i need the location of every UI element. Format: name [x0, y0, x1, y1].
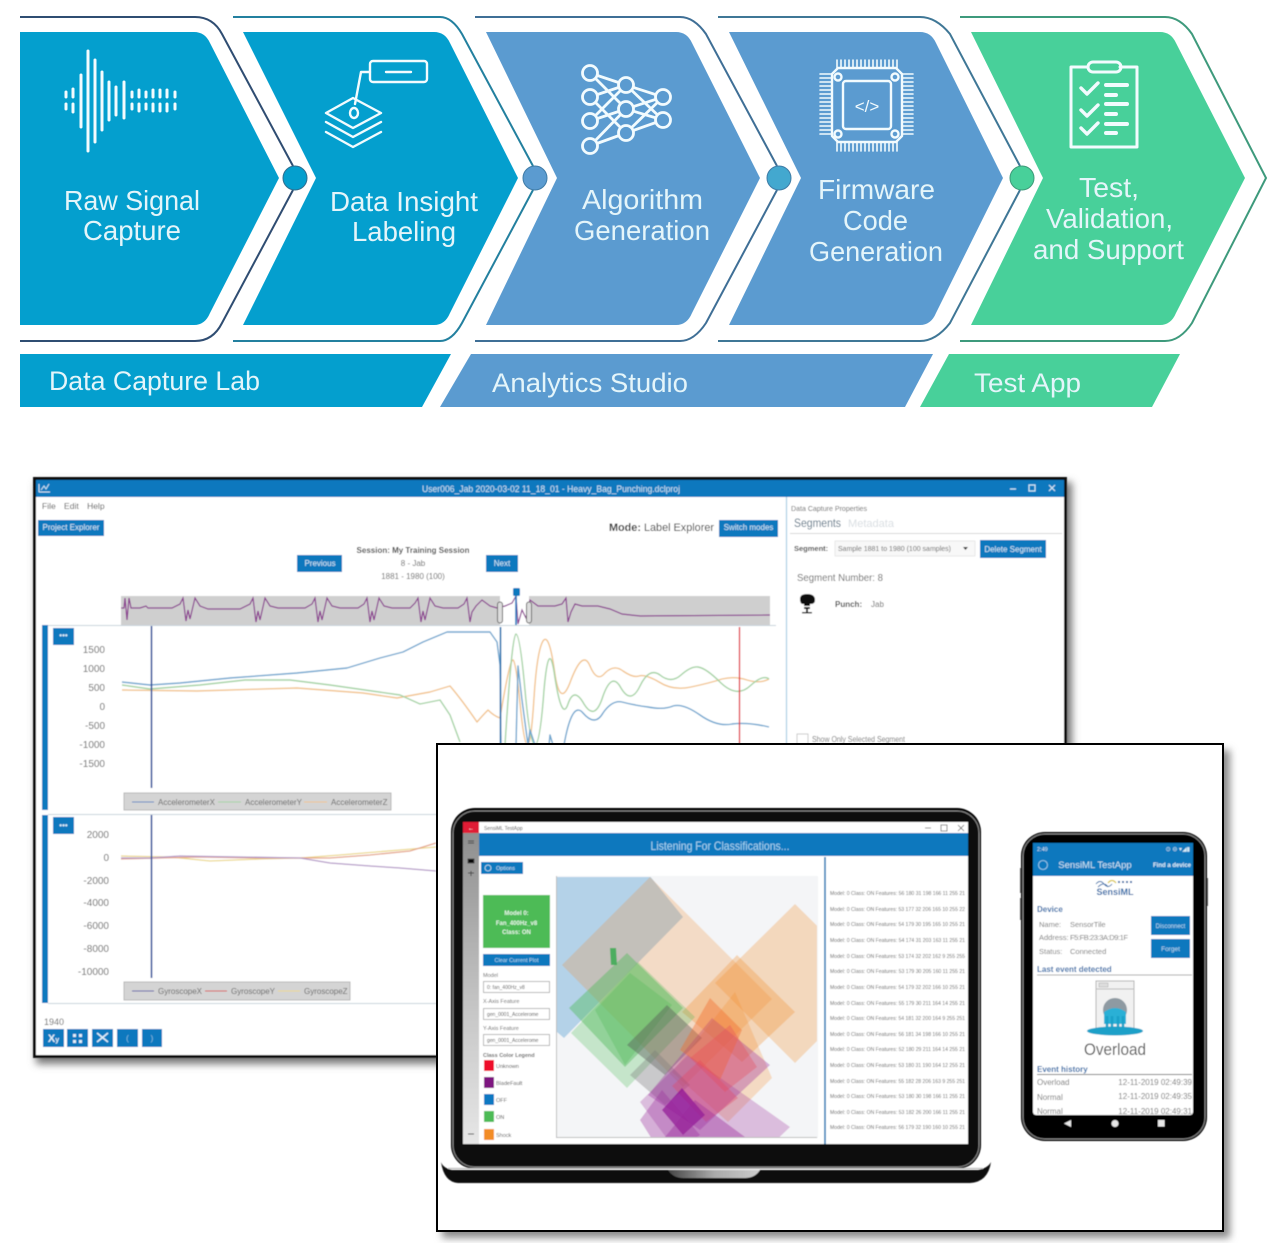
- device details: Name:: [1039, 920, 1061, 929]
- screenshot: data capture lab window: [34, 478, 1072, 1064]
- panel: gyroscope chart: •••: [59, 821, 68, 830]
- scatter plot of class regions: [556, 876, 818, 1138]
- label: [64, 185, 200, 246]
- event history: Event history: [1037, 1065, 1088, 1074]
- device details: SensorTile: [1070, 920, 1106, 929]
- panel: gyroscope chart: [42, 814, 440, 1004]
- label: [809, 174, 943, 267]
- menu: File Edit Help: [42, 501, 105, 511]
- laptop lid: [451, 808, 981, 1169]
- event history: 12-11-2019 02:49:39: [1118, 1078, 1193, 1087]
- device details: Forget: [1161, 946, 1180, 953]
- label: Raw Signal: [64, 185, 200, 216]
- classification log: Model: 0 Class: ON Features: 53 182 26 200 166 11 255 21: [830, 1110, 965, 1116]
- label: [1033, 172, 1184, 265]
- app chrome: [463, 822, 968, 1144]
- panel: accelerometer chart: [42, 625, 776, 810]
- session navigation: [297, 546, 518, 581]
- options column: Clear Current Plot: [494, 958, 539, 964]
- event history: Normal: [1037, 1107, 1063, 1116]
- band: test app: Test App: [974, 368, 1081, 398]
- legend: GyroscopeY: [231, 987, 276, 996]
- y axis: 2000: [87, 830, 109, 841]
- session navigation: Session: My Training Session: [357, 546, 470, 555]
- legend: [124, 793, 391, 810]
- mode selector: [609, 520, 778, 537]
- button: project explorer: [38, 520, 104, 536]
- y axis: 500: [88, 683, 105, 694]
- tool bands: [20, 354, 1180, 407]
- phone body: [1020, 832, 1208, 1141]
- label: Validation,: [1046, 203, 1173, 234]
- y axis: -6000: [83, 921, 109, 932]
- label: [330, 186, 478, 247]
- band: data capture lab: [20, 354, 451, 407]
- classification log: [825, 857, 965, 1144]
- classification log: Model: 0 Class: ON Features: 53 180 30 198 166 11 255 21: [830, 1094, 965, 1100]
- y axis: -1500: [79, 759, 105, 770]
- event history: Normal: [1037, 1093, 1063, 1102]
- SensiML logo: SensiML: [1096, 887, 1134, 897]
- legend: GyroscopeX: [158, 987, 203, 996]
- y axis: [79, 645, 105, 770]
- legend: AccelerometerY: [245, 798, 303, 807]
- app chrome: Listening For Classifications...: [650, 839, 790, 853]
- legend: AccelerometerZ: [331, 798, 388, 807]
- panel: data capture properties: Sample 1881 to 1980 (100 samples): [838, 544, 951, 553]
- android navigation bar: [1033, 1115, 1193, 1133]
- classification log: Model: 0 Class: ON Features: 55 182 28 206 163 9 255 251: [830, 1079, 965, 1085]
- panel: data capture properties: Punch:: [835, 600, 862, 609]
- workflow chevrons: [20, 17, 1266, 341]
- options column: 0: fan_400Hz_v8: [487, 985, 525, 991]
- y axis: 1000: [83, 664, 105, 675]
- session navigation: 1881 - 1980 (100): [381, 572, 445, 581]
- classification log: Model: 0 Class: ON Features: 56 181 34 198 166 10 255 21: [830, 1032, 965, 1038]
- options column: gen_0001_Accelerome: [487, 1038, 539, 1044]
- event history: 12-11-2019 02:49:31: [1118, 1107, 1193, 1116]
- icon: checklist clipboard: [1071, 62, 1137, 147]
- y axis: 0: [99, 702, 105, 713]
- icon: sound waveform: [66, 51, 175, 151]
- phone header: ⊙ ⊖ ▾◢▮: [1166, 847, 1190, 853]
- y axis: -4000: [83, 898, 109, 909]
- classification log: Model: 0 Class: ON Features: 54 179 30 195 165 10 255 21: [830, 922, 965, 928]
- SensiML logo: [1096, 880, 1134, 897]
- icon: neural network: [582, 66, 670, 154]
- device details: Connected: [1070, 947, 1106, 956]
- band: data capture lab: Data Capture Lab: [49, 366, 260, 396]
- classification badge: Model 0:: [504, 911, 529, 917]
- panel: data capture properties: Data Capture Properties: [791, 504, 867, 513]
- label: [574, 184, 710, 246]
- session navigation: 8 - Jab: [401, 559, 426, 568]
- legend: [124, 982, 350, 1000]
- toolbar buttons: (: [126, 1034, 129, 1043]
- label: Test,: [1079, 172, 1139, 203]
- classification log: Model: 0 Class: ON Features: 52 180 29 211 164 14 255 21: [830, 1047, 965, 1053]
- phone header: 2:49: [1037, 847, 1048, 853]
- y axis: -8000: [83, 944, 109, 955]
- button: project explorer: Project Explorer: [43, 523, 100, 532]
- icon: microchip with code: [820, 60, 913, 151]
- toolbar buttons: Xy: [48, 1033, 59, 1045]
- sample counter: 1940: [44, 1017, 64, 1027]
- class colour legend: Unknown: [496, 1064, 519, 1070]
- label: and Support: [1033, 234, 1184, 265]
- classification log: Model: 0 Class: ON Features: 53 180 31 190 164 12 255 21: [830, 1063, 965, 1069]
- y axis: -500: [85, 721, 105, 732]
- signal lines: [121, 843, 436, 871]
- phone header: [1033, 843, 1193, 876]
- class colour legend: OFF: [496, 1098, 508, 1104]
- device details: Device: [1037, 905, 1063, 914]
- mode selector: Switch modes: [724, 523, 773, 532]
- legend: GyroscopeZ: [304, 987, 348, 996]
- panel: data capture properties: Segment:: [794, 544, 828, 553]
- session navigation: Next: [494, 559, 511, 568]
- last event: [1037, 965, 1192, 1059]
- toolbar buttons: ): [151, 1034, 154, 1043]
- last event: Last event detected: [1037, 965, 1112, 974]
- panel: data capture properties: [786, 497, 1062, 745]
- mode selector: Mode: Label Explorer: [609, 522, 714, 534]
- icon: overflowing washing machine: [1087, 981, 1143, 1036]
- label: Algorithm: [582, 184, 703, 215]
- classification log: Model: 0 Class: ON Features: 54 179 32 202 166 10 255 21: [830, 985, 965, 991]
- event history: Overload: [1037, 1078, 1069, 1087]
- panel: data capture properties: Show Only Selected Segment: [812, 735, 906, 744]
- device: laptop: [441, 808, 991, 1183]
- icon: labelled data layers: [326, 61, 427, 147]
- classification log: Model: 0 Class: ON Features: 54 174 31 203 163 11 255 21: [830, 938, 965, 944]
- panel: data capture properties: Jab: [871, 600, 884, 609]
- label: Capture: [83, 215, 181, 246]
- icon: label cloud: [800, 594, 815, 614]
- class colour legend: Shock: [496, 1133, 512, 1139]
- classification badge: Fan_400Hz_v8: [496, 921, 538, 927]
- classification log: Model: 0 Class: ON Features: 56 180 31 198 166 11 255 21: [830, 891, 965, 897]
- panel: data capture properties: Segment Number: 8: [797, 573, 883, 584]
- band: analytics studio: Analytics Studio: [492, 368, 688, 398]
- panel: data capture properties: Delete Segment: [984, 545, 1042, 554]
- step: test, validation and support: [960, 17, 1266, 341]
- label: Data Insight: [330, 186, 478, 217]
- event history: 12-11-2019 02:49:35: [1118, 1092, 1193, 1101]
- label: Generation: [809, 236, 943, 267]
- label: Code: [843, 205, 908, 236]
- last event: Overload: [1084, 1040, 1146, 1059]
- options column: Y-Axis Feature: [483, 1026, 519, 1032]
- classification log: Model: 0 Class: ON Features: 56 179 32 190 160 10 255 21: [830, 1125, 965, 1131]
- y axis: [78, 830, 109, 978]
- classification log: Model: 0 Class: ON Features: 55 179 30 211 164 14 255 21: [830, 1001, 965, 1007]
- step: algorithm generation: [475, 17, 791, 341]
- classification log: Model: 0 Class: ON Features: 53 177 32 206 165 10 255 22: [830, 907, 965, 913]
- toolbar buttons: [43, 1029, 162, 1047]
- class colour legend: ON: [496, 1115, 504, 1121]
- icon: microchip with code: </>: [855, 97, 879, 116]
- laptop base: [441, 1162, 991, 1183]
- panel: data capture properties: Segments: [794, 516, 841, 530]
- band: analytics studio: [440, 354, 933, 407]
- band: test app: [920, 354, 1180, 407]
- device: phone: [1020, 832, 1208, 1141]
- y axis: -10000: [78, 967, 109, 978]
- app chrome: SensiML TestApp: [484, 826, 523, 832]
- y axis: 1500: [83, 645, 105, 656]
- step: firmware code generation: [718, 17, 1034, 341]
- step: data insight labeling: [233, 17, 547, 341]
- overlay: test app devices panel: [437, 744, 1230, 1238]
- options column: X-Axis Feature: [483, 999, 519, 1005]
- title bar: User006_Jab 2020-03-02 11_18_01 - Heavy_Bag_Punching.dclproj: [422, 484, 680, 495]
- label: Firmware: [818, 174, 935, 205]
- options column: gen_0001_Accelerome: [487, 1012, 539, 1018]
- y axis: -1000: [79, 740, 105, 751]
- label: Generation: [574, 215, 710, 246]
- y axis: 0: [103, 853, 109, 864]
- overview signal strip: [121, 588, 770, 625]
- classification badge: Class: ON: [502, 930, 531, 936]
- classification log: Model: 0 Class: ON Features: 53 174 32 202 162 9 255 255: [830, 954, 965, 960]
- classification log: Model: 0 Class: ON Features: 53 179 30 205 160 11 255 21: [830, 969, 965, 975]
- event history: [1037, 1065, 1193, 1116]
- panel: accelerometer chart: •••: [59, 631, 68, 640]
- options column: Class Color Legend: [483, 1053, 535, 1059]
- classification badge: [483, 895, 550, 948]
- phone header: SensiML TestApp: [1058, 860, 1132, 871]
- class colour legend: BladeFault: [496, 1081, 523, 1087]
- panel: data capture properties: Metadata: [848, 518, 895, 530]
- classification log: Model: 0 Class: ON Features: 54 181 32 200 164 9 255 251: [830, 1016, 965, 1022]
- title bar: [36, 480, 1064, 497]
- device details: Address:: [1039, 933, 1069, 942]
- step: raw signal capture: [20, 17, 307, 341]
- legend: AccelerometerX: [158, 798, 216, 807]
- phone header: Find a device: [1153, 862, 1191, 869]
- y axis: -2000: [83, 876, 109, 887]
- app chrome: ←: [468, 826, 474, 832]
- session navigation: Previous: [304, 559, 336, 568]
- device details: [1037, 905, 1190, 958]
- device details: Status:: [1039, 947, 1062, 956]
- options column: Model: [483, 973, 498, 979]
- options column: Options: [496, 866, 515, 872]
- label: Labeling: [352, 216, 456, 247]
- signal lines: [122, 632, 769, 745]
- class colour legend: [484, 1060, 523, 1140]
- device details: F5:FB:23:3A:D9:1F: [1070, 933, 1128, 942]
- options column: [481, 862, 550, 1140]
- device details: Disconnect: [1156, 924, 1186, 930]
